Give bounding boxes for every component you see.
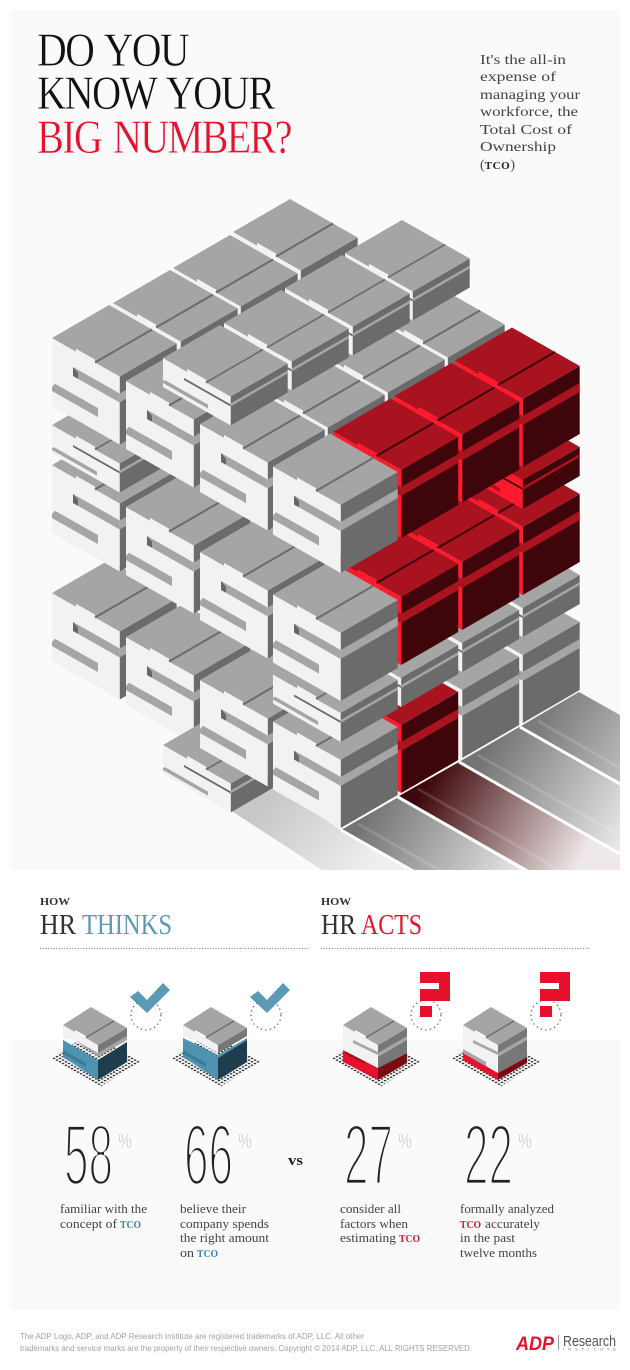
statistic: 27 percent: %: [398, 1130, 412, 1153]
intro text: definition of TCO: Total Cost of: [480, 123, 572, 138]
heading: how HR thinks: HOW: [40, 896, 70, 908]
floor shadows under the cube: [230, 692, 620, 870]
logo: ADP Research Institute: Research: [563, 1333, 616, 1350]
icon: check mark one: [130, 983, 170, 1030]
intro text: definition of TCO: managing your: [480, 88, 580, 103]
caption: 22 percent: [460, 1201, 554, 1260]
caption: 66 percent: TCO: [197, 1249, 218, 1260]
footer legal text: [20, 1332, 472, 1353]
caption: 22 percent: TCO: [460, 1220, 481, 1231]
heading: how HR acts: HOW: [321, 896, 351, 908]
footer legal text: trademarks and service marks are the property of their respective owners. Copyright © 2014 ADP, LLC. ALL RIGHTS RESERVED.: [20, 1344, 472, 1353]
caption: 66 percent: company spends: [180, 1216, 269, 1231]
title: [37, 23, 291, 164]
logo: ADP Research Institute: [515, 1333, 616, 1355]
icon: blue block 66 percent: [171, 1007, 260, 1087]
cube: front corner stack of grey blocks: [273, 434, 398, 828]
caption: 27 percent: estimating: [340, 1230, 397, 1245]
cube: middle depth stack with red blocks: [394, 363, 519, 758]
heading: how HR thinks: HR: [40, 910, 76, 941]
statistic: 66 percent: 66: [184, 1108, 233, 1204]
caption: 22 percent: twelve months: [460, 1245, 537, 1260]
icon: red block 27 percent: [331, 1007, 420, 1087]
cube: third column of dollar-sign blocks: [200, 286, 505, 787]
caption: 22 percent: in the past: [460, 1230, 515, 1245]
caption: 27 percent: consider all: [340, 1201, 401, 1216]
caption: 66 percent: [180, 1201, 269, 1260]
caption: 66 percent: on: [180, 1245, 195, 1260]
intro text: definition of TCO: Ownership: [480, 140, 556, 155]
heading: how HR acts: ACTS: [361, 910, 422, 941]
caption: 58 percent: [60, 1201, 147, 1231]
caption: 58 percent: concept of: [60, 1216, 118, 1231]
heading: how HR acts: [321, 896, 422, 941]
caption: 58 percent: familiar with the: [60, 1201, 147, 1216]
intro text: definition of TCO: (TCO): [480, 158, 515, 173]
title: BIG NUMBER?: [37, 111, 291, 164]
statistic: 58 percent: %: [118, 1130, 132, 1153]
statistic: 22 percent: 22: [464, 1108, 513, 1204]
heading: how HR thinks: [40, 896, 172, 941]
caption: 22 percent: formally analyzed: [460, 1201, 554, 1216]
background panel: hero: [10, 10, 620, 870]
logo: ADP Research Institute: INSTITUTE: [563, 1346, 616, 1352]
cube: second column of dollar-sign blocks: [126, 348, 288, 813]
cube: leftmost column of dollar-sign blocks: [52, 199, 358, 700]
footer legal text: The ADP Logo, ADP, and ADP Research Institute are registered trademarks of ADP, LLC. All other: [20, 1332, 364, 1341]
caption: 27 percent: factors when: [340, 1216, 409, 1231]
icon: check mark two: [250, 983, 290, 1030]
caption: 58 percent: TCO: [120, 1220, 141, 1231]
logo: ADP Research Institute: ADP: [515, 1334, 554, 1355]
intro text: definition of TCO: expense of: [480, 70, 556, 85]
intro text: definition of TCO: [480, 53, 580, 173]
caption: 22 percent: accurately: [485, 1216, 541, 1231]
statistic: 58 percent: 58: [64, 1108, 113, 1204]
statistic: 27 percent: 27: [344, 1108, 393, 1204]
icon: red block 22 percent: [451, 1007, 540, 1087]
cube: near depth stack with red blocks: [334, 398, 458, 793]
caption: 27 percent: TCO: [399, 1234, 420, 1245]
label: versus: vs: [288, 1153, 303, 1169]
statistic: 66 percent: %: [238, 1130, 252, 1153]
caption: 27 percent: [340, 1201, 420, 1245]
icon: question mark one: [411, 972, 450, 1030]
caption: 66 percent: believe their: [180, 1201, 247, 1216]
cube: back depth stack with red blocks: [455, 328, 580, 723]
icon: question mark two: [531, 972, 570, 1030]
caption: 66 percent: the right amount: [180, 1230, 269, 1245]
title: KNOW YOUR: [37, 66, 276, 120]
background panel: statistics band: [10, 1040, 620, 1310]
title: DO YOU: [37, 23, 189, 77]
heading: how HR acts: HR: [321, 910, 356, 941]
heading: how HR thinks: THINKS: [82, 910, 172, 941]
intro text: definition of TCO: It's the all-in: [480, 53, 566, 68]
intro text: definition of TCO: workforce, the: [480, 105, 578, 120]
statistic: 22 percent: %: [518, 1130, 532, 1153]
icon: blue block 58 percent: [51, 1007, 140, 1087]
cube: raised squat row on top: [163, 220, 470, 426]
